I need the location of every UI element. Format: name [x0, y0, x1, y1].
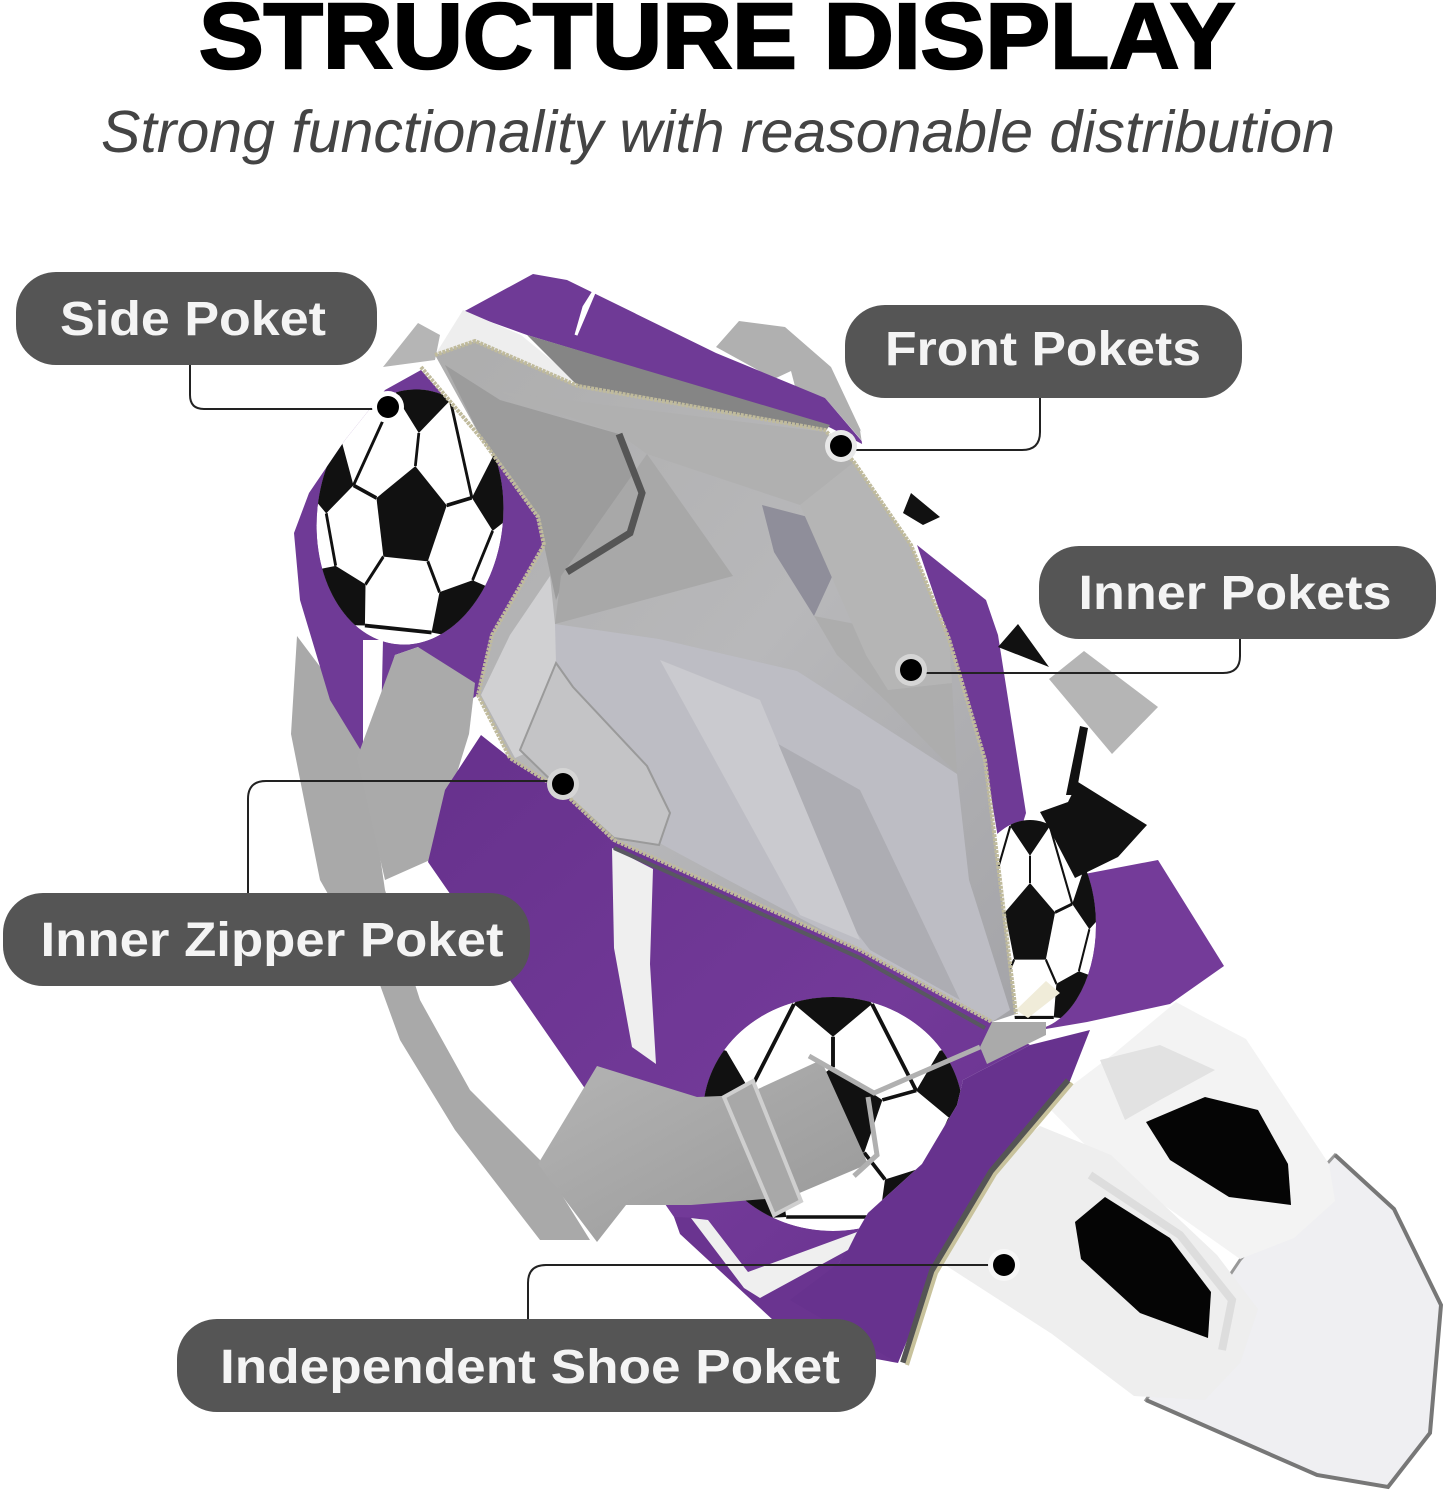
- front shoe opening: [1075, 1197, 1211, 1338]
- leader: inner zipper pocket: [248, 781, 553, 893]
- label: inner zipper pocket: [3, 893, 530, 986]
- shoe pocket zipper: [904, 1081, 1069, 1363]
- inner strap left: [357, 647, 475, 880]
- grey zipper tape: [527, 335, 830, 432]
- dark gap: [762, 505, 854, 616]
- bottom panel: [674, 1217, 898, 1363]
- corner strap grey: [383, 323, 440, 367]
- leader: front pockets: [850, 398, 1040, 450]
- leader: shoe pocket: [528, 1265, 995, 1319]
- rear shoe laces: [1100, 1045, 1215, 1120]
- interior left wall: [445, 365, 642, 600]
- leader: inner pockets: [920, 639, 1240, 673]
- inner pocket flap: [814, 616, 957, 774]
- label: inner pockets: Inner Pokets: [1078, 567, 1392, 620]
- marker: shoe pocket: [988, 1249, 1020, 1281]
- marker: inner pockets: [895, 654, 927, 686]
- interior upper flap: [500, 392, 887, 530]
- label: front pockets: Front Pokets: [885, 323, 1201, 376]
- front purple panel: [428, 735, 1030, 1272]
- label: independent shoe pocket: [177, 1319, 876, 1412]
- label: side pocket: Side Poket: [60, 293, 326, 346]
- label: front pockets: [845, 305, 1242, 398]
- buckle: [724, 1081, 801, 1215]
- top white swoosh: [576, 288, 596, 335]
- shoe compartment lining: [1146, 1155, 1441, 1487]
- marker: inner zipper pocket: [547, 768, 579, 800]
- shoulder strap: [538, 1060, 868, 1242]
- right black patches: [903, 493, 1147, 878]
- label: side pocket: [16, 272, 377, 365]
- zipper tape edge: [614, 848, 985, 1028]
- label: independent shoe pocket: Independent Shoe Poket: [220, 1341, 840, 1394]
- side handle right: [1049, 651, 1158, 754]
- white tip: [1124, 838, 1164, 857]
- interior lining: [435, 341, 1016, 1022]
- metal hook: [809, 1047, 980, 1176]
- illustration: duffel bag: [280, 274, 1441, 1487]
- bottom purple flap: [762, 1030, 1090, 1363]
- zipper pull: [1016, 981, 1060, 1018]
- interior dark drawstring: [567, 434, 642, 572]
- front shoe: [942, 1126, 1258, 1400]
- left lining light fold: [481, 576, 556, 758]
- lilac fabric folds: [550, 624, 1010, 1022]
- right ball: [997, 820, 1096, 1027]
- back strap: left: [291, 636, 590, 1240]
- back purple top panel: [463, 274, 866, 446]
- subtitle: Strong functionality with reasonable distribution: [101, 99, 1335, 165]
- right lower purple: [1005, 860, 1224, 1030]
- right white panel: [860, 430, 1165, 877]
- rear shoe opening: [1146, 1097, 1291, 1205]
- label: inner pockets: [1039, 546, 1436, 639]
- marker: front pockets: [825, 430, 857, 462]
- white stripe, front: [612, 848, 656, 1064]
- top handle: [716, 321, 870, 450]
- left panel with ball: [294, 370, 544, 750]
- zipper slider: [980, 1022, 1046, 1064]
- zippers: [421, 341, 1016, 1022]
- marker: side pocket: [372, 391, 404, 423]
- handle white patch: [774, 371, 797, 394]
- front shoe collar: [1090, 1175, 1232, 1350]
- inner zipper pocket: [520, 663, 670, 845]
- white band at top corner: [435, 310, 578, 382]
- right purple wedge: [917, 545, 1026, 880]
- bottom white stripes: [691, 1218, 857, 1298]
- rear shoe: [1046, 1002, 1335, 1259]
- interior crumple: [555, 454, 733, 624]
- label: inner zipper pocket: Inner Zipper Poket: [40, 914, 504, 967]
- leader: side pocket: [190, 365, 378, 409]
